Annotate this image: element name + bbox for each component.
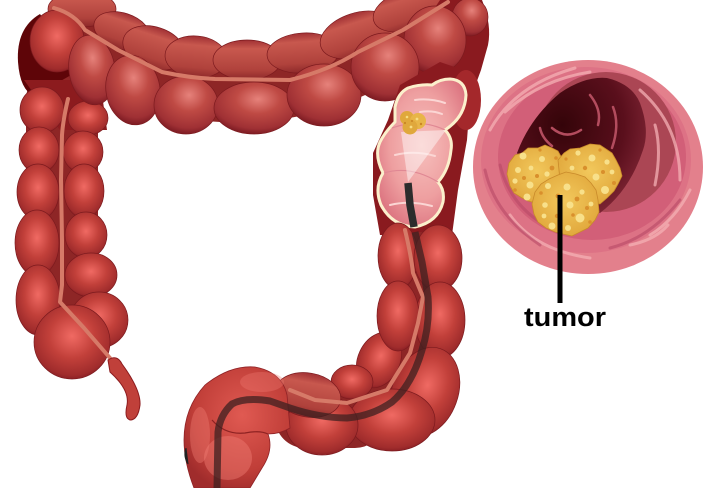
- inner folds: [540, 95, 616, 148]
- rectum: [184, 367, 290, 488]
- mesentery band: transverse: [54, 2, 448, 80]
- endoscope tube: [217, 183, 428, 488]
- label: tumor: tumor: [524, 302, 607, 332]
- tumor bumps: [512, 150, 614, 231]
- highlighted pink section: [378, 79, 466, 227]
- lumen: [517, 78, 646, 213]
- small tumor: [400, 111, 426, 134]
- transverse colon: [30, 0, 489, 134]
- mesentery band: descending: [290, 230, 423, 403]
- endoscope light cone: [401, 130, 446, 182]
- mesentery band: ascending: [60, 99, 110, 358]
- tumor leader line: [558, 195, 562, 303]
- inset: colon interior view: [473, 60, 703, 274]
- descending colon with highlighted section: [272, 62, 481, 455]
- tumor mass: [507, 144, 622, 236]
- appendix: [108, 358, 140, 420]
- lobe folds: [384, 123, 445, 182]
- ascending colon: [15, 14, 128, 379]
- wall highlights: [490, 68, 690, 258]
- colon illustration: [15, 0, 489, 488]
